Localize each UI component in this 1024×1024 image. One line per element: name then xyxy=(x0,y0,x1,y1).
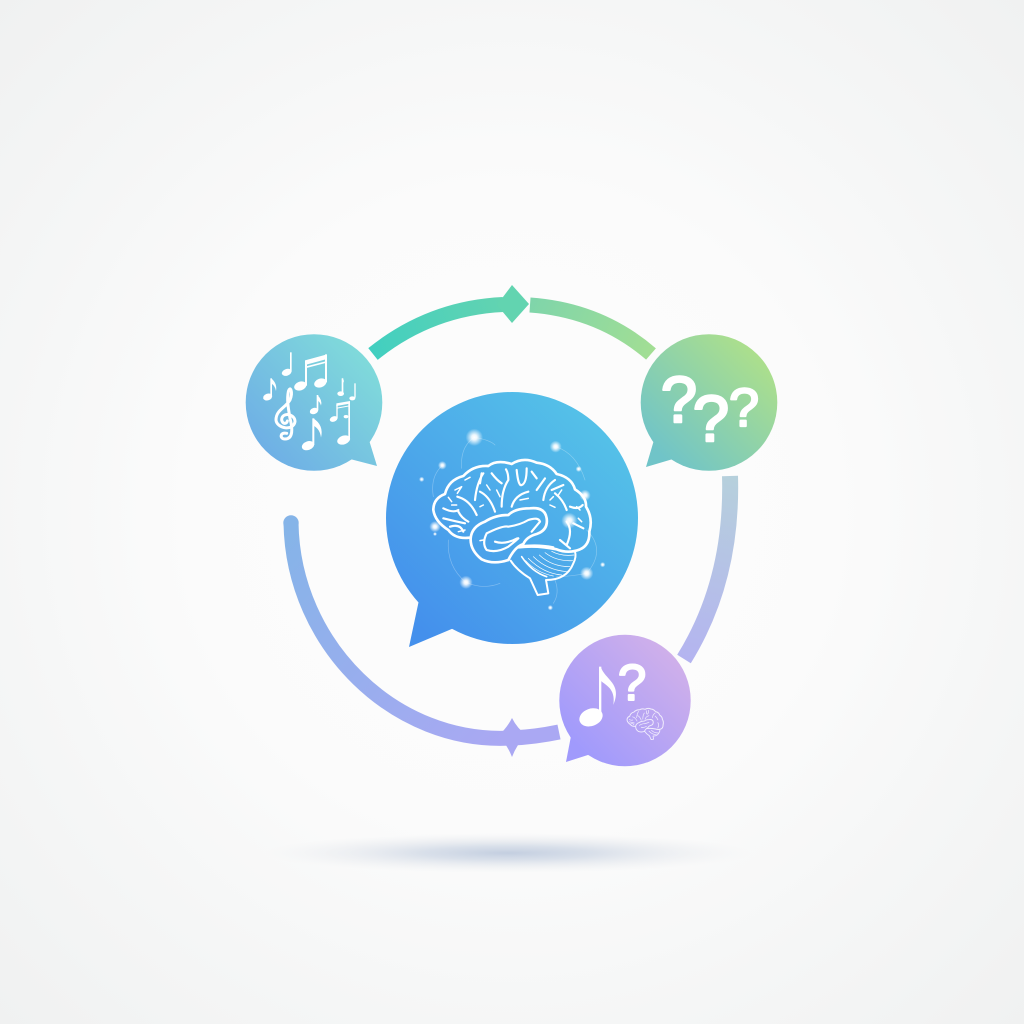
question marks xyxy=(661,363,759,455)
question mark: ? xyxy=(618,654,646,711)
note: small upper right xyxy=(337,378,356,400)
arrow: music to questions, first half xyxy=(373,285,529,354)
note: bottom large xyxy=(301,418,322,452)
central speech bubble with brain xyxy=(386,392,638,647)
bubble: central xyxy=(386,392,638,647)
neural arcs xyxy=(433,437,597,603)
ground shadow xyxy=(263,833,753,873)
icon: brain xyxy=(419,429,605,610)
note: centre xyxy=(309,395,321,415)
glowing sparkles xyxy=(419,429,605,610)
bubble: questions xyxy=(641,334,777,471)
questions speech bubble xyxy=(641,334,777,471)
icon: small brain xyxy=(627,708,663,740)
question marks: ? xyxy=(661,363,697,436)
note: single top xyxy=(281,352,293,377)
question marks: ? xyxy=(693,382,729,455)
cerebellum striations xyxy=(526,551,574,576)
cycle ring arrows xyxy=(283,285,730,757)
bubble: music xyxy=(246,334,382,471)
arrow: music to questions, second half xyxy=(530,305,651,354)
icon: treble clef xyxy=(276,389,295,439)
arrow: purple bubble back to music xyxy=(283,515,559,757)
music speech bubble xyxy=(246,334,382,471)
note: left xyxy=(262,378,276,402)
icon: music notes xyxy=(262,352,356,452)
purple speech bubble xyxy=(559,635,691,766)
icon: music note xyxy=(577,667,616,730)
question marks: ? xyxy=(729,378,759,438)
note: right beamed xyxy=(329,401,351,446)
note: beamed pair xyxy=(293,354,328,392)
brain outline xyxy=(433,460,591,552)
small textured folds xyxy=(448,477,582,541)
arrow: questions to purple bubble xyxy=(684,476,730,659)
bubble: music question xyxy=(559,635,691,766)
sulci lines xyxy=(443,468,583,551)
